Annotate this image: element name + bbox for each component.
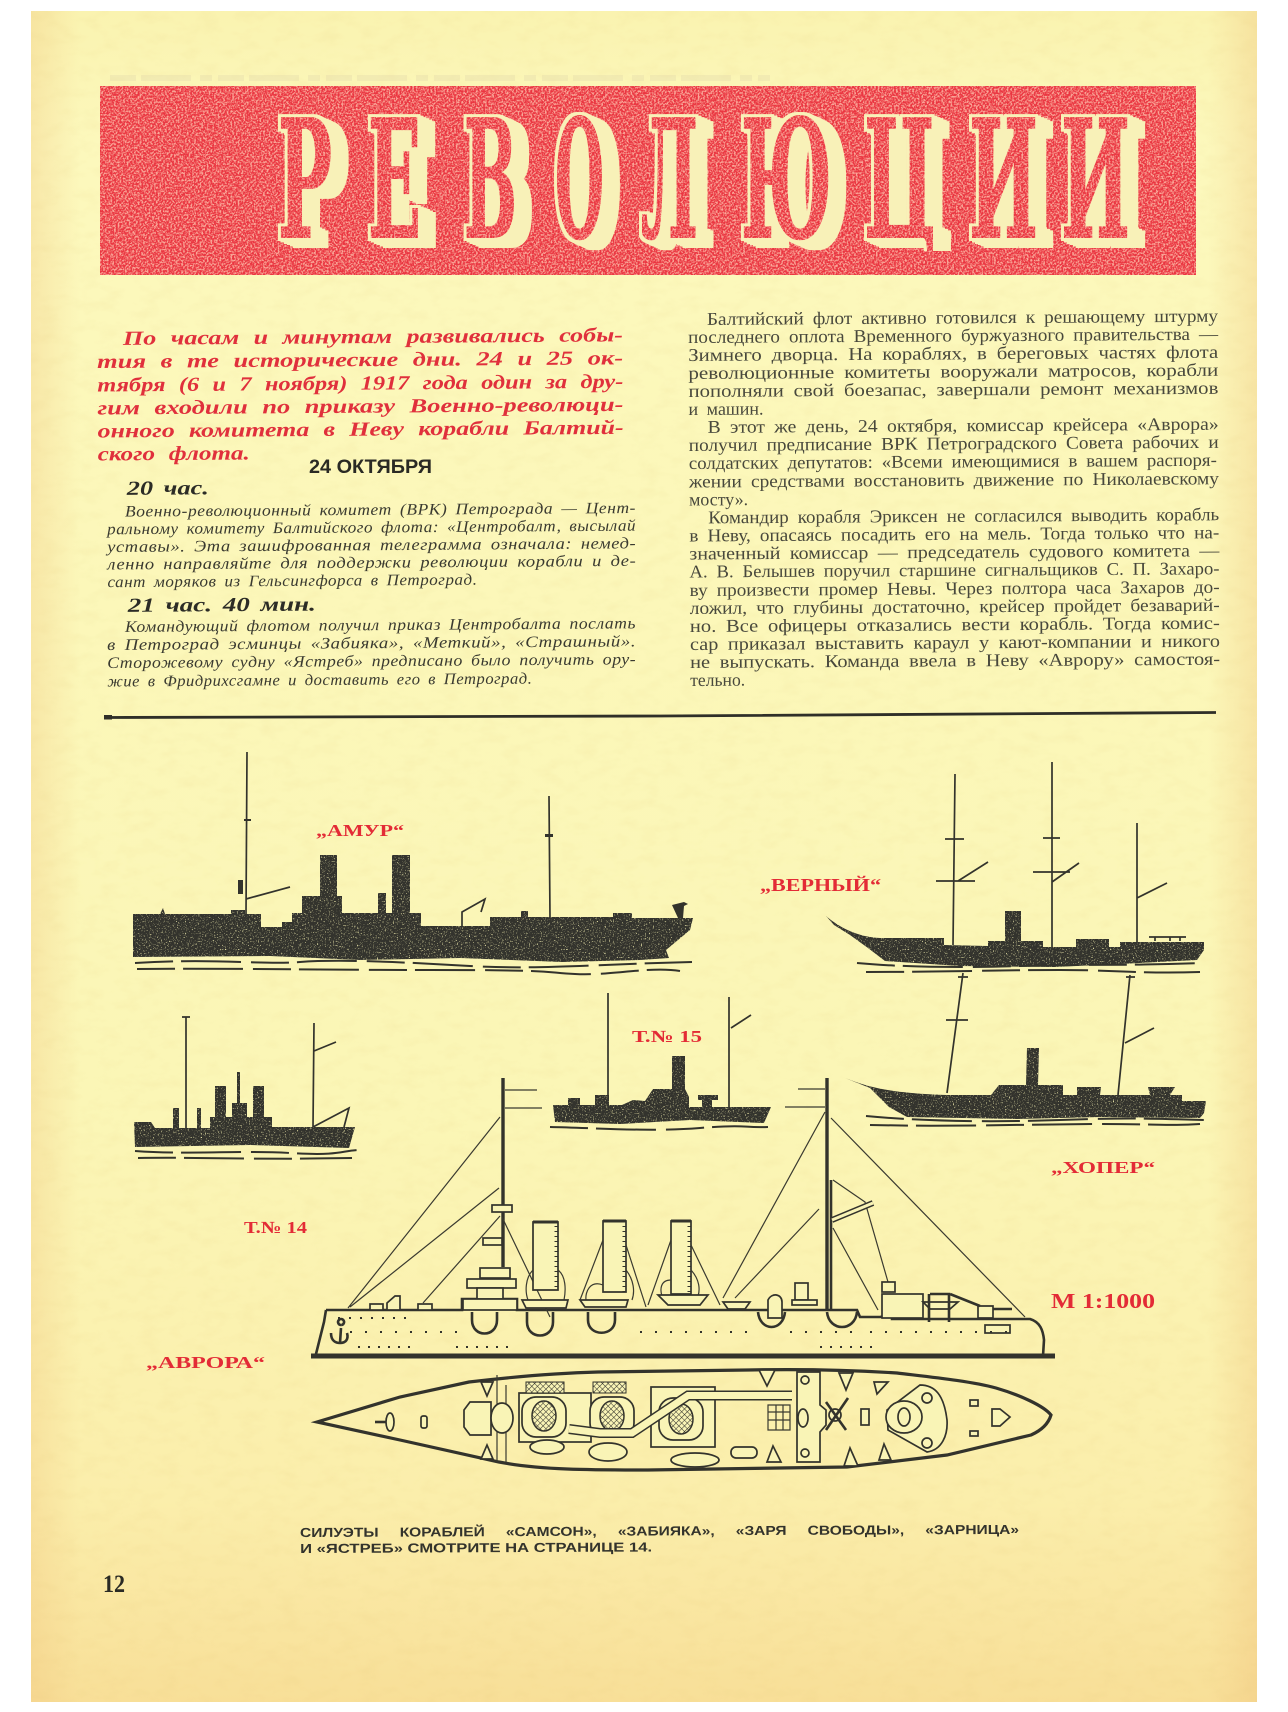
- right column text: последнего оплота Временного буржуазного правительства —: [688, 324, 1219, 347]
- timeline entry: 20 час: 20 час.: [125, 477, 209, 500]
- page number: 12: [103, 1571, 125, 1598]
- funnels: [522, 1397, 566, 1437]
- red introduction text: [97, 324, 624, 465]
- title banner: В: [464, 85, 517, 276]
- caption: И «ЯСТРЕБ» СМОТРИТЕ НА СТРАНИЦЕ 14.: [300, 1539, 652, 1556]
- title banner: Л: [641, 85, 698, 276]
- right column text: жении средствами восстановить движение по Николаевскому: [688, 468, 1219, 492]
- forward fittings: [375, 1421, 386, 1423]
- aft structures: [795, 1283, 808, 1300]
- caption: [300, 1522, 1019, 1556]
- ship silhouette: Khoper: [845, 973, 1206, 1126]
- right column text: А. В. Белышев поручил старшине сигнальщиков С. П. Захаро-: [689, 558, 1220, 581]
- heading: 24 октября: 24 ОКТЯБРЯ: [309, 457, 432, 478]
- red introduction text: онного комитета в Неву корабли Балтий-: [98, 417, 624, 442]
- walkway: [569, 1396, 792, 1433]
- ship silhouette: Verny: [826, 762, 1204, 973]
- timeline entry: 21 час 40 мин: Сторожевому судну «Ястреб» предписано было получить ору-: [107, 651, 636, 672]
- timeline entry: 21 час 40 мин: Командующий флотом получил приказ Центробалта послать: [124, 615, 636, 636]
- timeline entry: 20 час: ральному комитету Балтийского флота: «Центробалт, высылай: [106, 518, 636, 538]
- red introduction text: тября (6 и 7 ноября) 1917 года один за дру-: [97, 371, 623, 396]
- side guns: [481, 1382, 493, 1396]
- masts and rigging: [503, 1078, 827, 1310]
- timeline entry: 21 час 40 мин: в Петроград эсминцы «Забияка», «Меткий», «Страшный».: [107, 633, 636, 654]
- red introduction text: ского флота.: [98, 442, 250, 465]
- aft bridge: [797, 1372, 826, 1462]
- funnels: [533, 1222, 558, 1290]
- hull outline: [317, 1370, 1051, 1470]
- title banner: И: [969, 85, 1038, 276]
- aft turret: [887, 1385, 947, 1452]
- sponsons: [472, 1312, 857, 1336]
- right column text: В этот же день, 24 октября, комиссар крейсера «Аврора»: [708, 414, 1219, 437]
- icon: anchor: [331, 1319, 348, 1343]
- label: Khoper: „ХОПЕР“: [1051, 1158, 1155, 1177]
- cruiser Aurora: plan view: [317, 1370, 1051, 1470]
- label: Amur: „АМУР“: [316, 821, 404, 840]
- right column text: значенный комиссар — председатель судового комитета —: [689, 540, 1221, 563]
- right column text: сар приказал выставить караул у кают-компании и никого: [690, 631, 1220, 654]
- title banner: И: [1061, 85, 1130, 276]
- bridge: [480, 1268, 510, 1278]
- right column text: в Неву, опасаясь посадить его на мель. Тогда только что на-: [689, 522, 1219, 545]
- red introduction text: По часам и минутам развивались собы-: [122, 324, 623, 350]
- label: T No 15: Т.№ 15: [632, 1027, 702, 1046]
- right column text: тельно.: [690, 670, 745, 690]
- portholes: [338, 1317, 410, 1319]
- caption: СИЛУЭТЫ КОРАБЛЕЙ «САМСОН», «ЗАБИЯКА», «ЗАРЯ СВОБОДЫ», «ЗАРНИЦА»: [300, 1522, 1019, 1540]
- boats: [522, 1300, 568, 1308]
- title banner: [100, 85, 1196, 276]
- title banner: Р: [278, 85, 332, 276]
- title banner: Ю: [741, 85, 832, 276]
- label: scale: М 1:1000: [1051, 1289, 1155, 1313]
- timeline entry: 21 час 40 мин: [107, 591, 636, 690]
- right column text: Зимнего дворца. На кораблях, в береговых частях флота: [688, 342, 1218, 365]
- cruiser Aurora: side elevation: [311, 1078, 1055, 1356]
- right column text: ложил, что глубины достаточно, крейсер пройдет безаварий-: [690, 595, 1220, 618]
- red introduction text: гим входили по приказу Военно-революци-: [97, 394, 624, 419]
- timeline entry: 20 час: сант моряков из Гельсингфорса в Петроград.: [107, 572, 478, 591]
- casings: [519, 1393, 591, 1442]
- right column text: получил предписание ВРК Петроградского Совета рабочих и: [689, 432, 1219, 455]
- ship silhouette: Amur: [133, 752, 693, 974]
- hull: [316, 1299, 1044, 1356]
- red introduction text: тия в те исторические дни. 24 и 25 ок-: [97, 347, 623, 373]
- right column text: Балтийский флот активно готовился к решающему штурму: [707, 306, 1218, 329]
- right column text: мосту».: [689, 489, 748, 509]
- right column text: солдатских депутатов: «Всеми имеющимися в вашем распоря-: [689, 450, 1217, 473]
- ship silhouette: T No 15: [550, 993, 771, 1130]
- timeline entry: 20 час: ленно направляйте для поддержки революции корабли и де-: [106, 553, 636, 574]
- title banner: Ц: [864, 85, 936, 276]
- label: T No 14: Т.№ 14: [244, 1218, 308, 1237]
- label: Verny: „ВЕРНЫЙ“: [760, 874, 881, 895]
- timeline entry: 20 час: уставы». Эта зашифрованная телеграмма означала: немед-: [105, 535, 636, 556]
- right column text: но. Все офицеры отказались вести корабль. Тогда комис-: [690, 613, 1220, 636]
- boats: [530, 1440, 564, 1454]
- ship silhouette: small steamer: [134, 1017, 358, 1159]
- right column text: ву произвести промер Невы. Через полтора часа Захаров до-: [690, 577, 1220, 600]
- right column text: [687, 306, 1221, 690]
- right column text: и машин.: [688, 399, 764, 419]
- right column text: Командир корабля Эриксен не согласился выводить корабль: [708, 504, 1219, 527]
- right column text: революционные комитеты вооружали матросов, корабли: [688, 360, 1219, 383]
- title banner: О: [555, 85, 604, 276]
- label: Aurora: „АВРОРА“: [146, 1353, 265, 1372]
- timeline entry: 21 час 40 мин: 21 час. 40 мин.: [126, 594, 316, 617]
- timeline entry: 20 час: [104, 474, 637, 591]
- right column text: не выпускать. Команда ввела в Неву «Аврору» самостоя-: [690, 649, 1220, 672]
- timeline entry: 20 час: Военно-революционный комитет (ВРК) Петрограда — Цент-: [125, 500, 636, 521]
- right column text: пополняли свой боезапас, завершали ремонт механизмов: [688, 378, 1218, 401]
- timeline entry: 21 час 40 мин: жие в Фридрихсгамне и доставить его в Петроград.: [107, 671, 532, 690]
- title banner: Е: [368, 85, 421, 276]
